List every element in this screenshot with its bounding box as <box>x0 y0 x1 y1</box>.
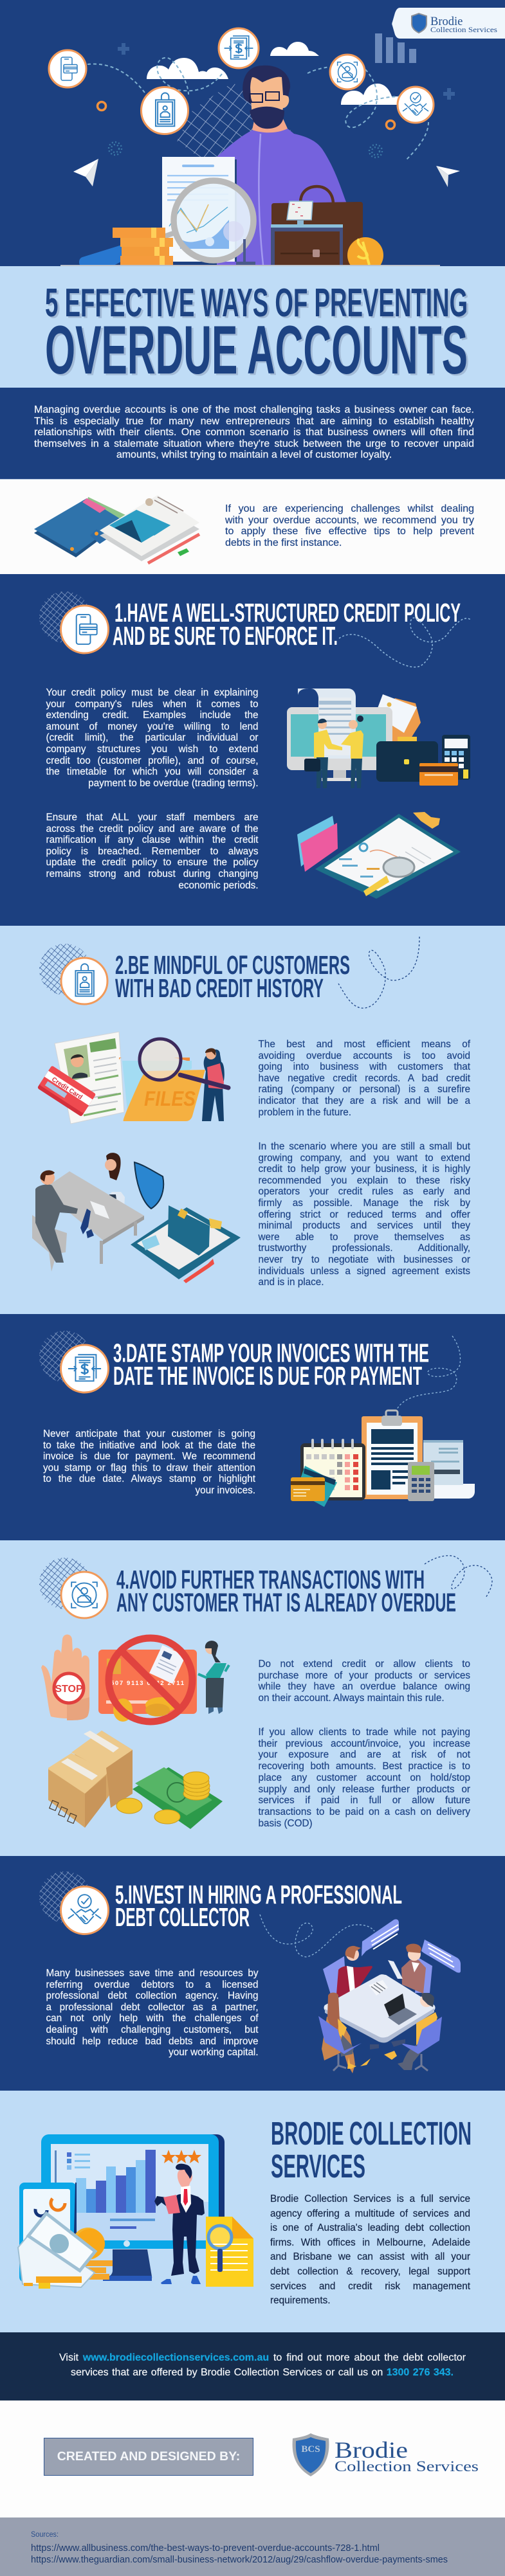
body text 1 <box>46 687 259 789</box>
intro text: Managing overdue accounts is one of the most challenging tasks a business owner can face. <box>34 404 474 415</box>
body text 8: a professional debt collector as a partner, <box>46 2002 259 2013</box>
illustration: stop hand and blocked card: STOP <box>55 1684 83 1695</box>
plus marks <box>118 43 455 100</box>
body text 4 <box>258 1141 471 1288</box>
body text 7: transactions to be paid on a cash on delivery <box>259 1806 470 1817</box>
call to action text: Visit www.brodiecollectionservices.com.au to find out more about the debt collector <box>59 2352 466 2363</box>
body text 4: were able to prove themselves as <box>259 1232 470 1243</box>
body text 2: update the credit policy to ensure the policy <box>46 857 259 868</box>
body text 8: Many businesses save time and resources by <box>46 1968 259 1979</box>
icon: blocked customer <box>330 55 365 89</box>
body text 7: basis (COD) <box>259 1818 313 1829</box>
title <box>45 281 470 388</box>
body text 5: Never anticipate that your customer is going <box>43 1428 255 1439</box>
about text: and Brisbane we can assist with all your <box>270 2251 470 2262</box>
about text: requirements. <box>270 2295 331 2306</box>
body text 5: your invoices. <box>195 1485 255 1496</box>
intro text: This is especially true for many new entrepreneurs that are aiming to establish healthy <box>34 416 474 427</box>
coin stack <box>113 228 173 265</box>
body text 3: The best and most efficient means of <box>259 1039 470 1050</box>
panel: hero illustration <box>0 0 505 266</box>
icon: handshake <box>398 87 434 123</box>
body text 8: should help reduce bad debts and improve <box>46 2036 259 2047</box>
body text 1: credit too (customer profile), and of course, <box>46 755 259 766</box>
heading <box>113 598 461 651</box>
heading <box>271 2115 472 2184</box>
illustration: credit file review <box>37 1032 228 1124</box>
illustration: analyst with dashboard <box>18 2134 253 2289</box>
body text 7 <box>259 1727 471 1829</box>
body text 5 <box>42 1428 255 1496</box>
lattice backdrop <box>177 82 302 167</box>
body text 4: individuals unless a signed agreement exists <box>259 1266 470 1277</box>
body text 8 <box>46 1968 259 2058</box>
panel: about Brodie Collection Services <box>0 2091 505 2332</box>
body text 6: purchase more of your products or services <box>259 1670 470 1681</box>
body text 1: the timetable for which you will consider a <box>46 766 259 777</box>
dollar coin <box>347 237 383 273</box>
body text 7: services if paid in full or allow future <box>259 1795 470 1806</box>
body text 7: your exposure and are at risk of not <box>259 1749 470 1760</box>
panel: credit <box>0 2400 505 2517</box>
body text 1: payment to be overdue (trading terms). <box>88 778 259 789</box>
illustration: stop hand and blocked card: 507 9113 0142 2711 <box>111 1680 185 1687</box>
logo: Collection Services <box>335 2458 479 2474</box>
call to action text <box>59 2352 466 2378</box>
body text 7: supply and only release further products or <box>259 1784 470 1795</box>
sources list: Sources: <box>31 2531 59 2539</box>
body text 3: indicator that they are a risk and will be a <box>259 1095 470 1106</box>
body text 4: recommended you explain to these risky <box>259 1175 470 1186</box>
icon: blocked customer badge <box>61 1572 107 1618</box>
heading: WITH BAD CREDIT HISTORY <box>115 973 324 1003</box>
sources list: https://www.theguardian.com/small-business-network/2012/aug/29/cashflow-overdue-payments-smes <box>31 2555 448 2565</box>
body text 4: trustworthy professionals. Additionally, <box>259 1243 470 1254</box>
wallet and documents illustration <box>34 495 201 564</box>
recommendation text: with your overdue accounts, we recommend you try <box>225 515 474 526</box>
body text 6: while they have an overdue balance owing <box>259 1681 470 1692</box>
body text 4: operators your credit rules as early and <box>259 1186 470 1197</box>
table edge <box>60 265 440 266</box>
logo: BCS <box>301 2444 320 2454</box>
heading <box>113 1338 429 1391</box>
burst marks <box>109 142 382 158</box>
about text: agency offering a multitude of services and <box>270 2208 470 2219</box>
body text 4: firmly as possible. Manage the risk by <box>259 1198 470 1209</box>
illustration: cards and clipboard <box>297 812 461 899</box>
intro text <box>34 404 475 460</box>
body text 4: credit to help grow your business, it is highly <box>259 1164 470 1175</box>
logo tab: Collection Services <box>430 26 498 34</box>
about text: firms. With offices in Melbourne, Adelaide <box>270 2237 470 2248</box>
body text 1: extending credit. Examples include the <box>46 710 259 721</box>
body text 4: In the scenario where you are still a small but <box>259 1141 470 1152</box>
body text 3: avoiding overdue accounts is too avoid <box>259 1050 470 1061</box>
illustration: boxes and money <box>48 1731 223 1829</box>
logo <box>292 2433 479 2476</box>
body text 7: place any customer account on hold/stop <box>259 1772 470 1783</box>
heading <box>115 950 350 1003</box>
dotted path <box>397 1336 461 1409</box>
body text 3: going into business with customers that <box>259 1061 470 1072</box>
lattice decoration <box>39 1871 91 1923</box>
body text 5: invoice is due for payment. We recommend <box>43 1451 255 1462</box>
body text 8: referring overdue debtors to a licensed <box>46 1979 259 1990</box>
dotted path <box>260 1914 374 1957</box>
panel: tip 3 <box>0 1314 505 1540</box>
body text 7: recovering both amounts. Best practice is to <box>259 1761 470 1772</box>
illustration: meeting with shield and briefcase <box>32 1153 241 1283</box>
body text 5: to take the initiative and look at the date the <box>43 1440 255 1451</box>
call to action text: services that are offered by Brodie Collection Services or call us on 1300 276 343. <box>71 2367 454 2378</box>
body text 3: problem in the future. <box>259 1107 351 1118</box>
magnifier and chart <box>79 181 253 266</box>
lattice decoration <box>39 1331 91 1382</box>
illustration: credit file review: FILES <box>144 1087 196 1110</box>
panel: call to action <box>0 2332 505 2400</box>
body text 4: and is in place. <box>259 1277 324 1288</box>
body text 2: economic periods. <box>178 880 259 891</box>
icon: document with lock badge <box>61 958 107 1004</box>
lattice decoration <box>39 591 91 643</box>
body text 5: you stamp or flag this to draw their attention <box>43 1463 255 1473</box>
recommendation text: debts in the first instance. <box>225 537 342 548</box>
heading <box>115 1880 402 1932</box>
dotted flight paths <box>87 58 428 159</box>
orange rings <box>98 102 395 129</box>
heading: SERVICES <box>271 2148 365 2184</box>
sources list: https://www.allbusiness.com/the-best-ways-to-prevent-overdue-accounts-728-1.html <box>31 2543 380 2553</box>
illustration: stop hand and blocked card <box>41 1634 229 1722</box>
intro text: amounts, whilst trying to maintain a level of customer loyalty. <box>116 449 392 460</box>
panel: tip 4 <box>0 1540 505 1856</box>
body text 3 <box>259 1039 471 1118</box>
body text 2: across the credit policy and are aware of the <box>46 824 259 834</box>
panel: introduction <box>0 388 505 479</box>
body text 7: their previous account/invoice, you increase <box>259 1738 470 1749</box>
body text 2: policy is breached. Remember to always <box>46 846 259 857</box>
body text 2 <box>46 812 259 891</box>
intro text: relationships with their clients. One common scenario is that business owners will often find <box>34 427 474 438</box>
lattice decoration <box>39 1558 91 1609</box>
icon: handshake badge <box>60 1886 108 1934</box>
lattice decoration <box>39 944 91 995</box>
heading: AND BE SURE TO ENFORCE IT. <box>113 621 338 651</box>
man <box>217 66 350 266</box>
body text 4: never try to negotiate with businesses or <box>259 1254 470 1265</box>
body text 3: have negative credit records. A bad credit <box>259 1073 470 1084</box>
body text 1: company structures you wish to extend <box>46 744 259 755</box>
icon: phone and card badge <box>60 606 108 653</box>
icon: dollar document <box>219 28 259 68</box>
dotted path <box>338 937 419 1008</box>
sources list <box>31 2531 448 2565</box>
panel: white recommendation band <box>0 479 505 574</box>
dotted path <box>425 1556 492 1598</box>
recommendation text <box>225 503 475 548</box>
body text 8: can not only help with the challenges of <box>46 2013 259 2024</box>
about text <box>270 2193 470 2306</box>
panel: sources <box>0 2517 505 2576</box>
about text: services and credit risk management <box>270 2281 470 2292</box>
bar chart decoration <box>375 33 416 63</box>
heading <box>116 1565 456 1617</box>
body text 4: offering strict or reduced terms and offer <box>259 1209 470 1220</box>
icon: phone and card <box>49 50 86 87</box>
body text 6: Do not extend credit or allow clients to <box>259 1659 470 1670</box>
created and designed by box: CREATED AND DESIGNED BY: <box>57 2449 240 2463</box>
panel: tip 2 <box>0 926 505 1314</box>
panel: tip 5 <box>0 1856 505 2091</box>
paper planes <box>73 159 460 187</box>
illustration: invoice set <box>291 1410 475 1507</box>
about text: is one of Australia's leading debt collection <box>270 2222 470 2233</box>
body text 8: dealing with challenging customers, but <box>46 2024 259 2035</box>
body text 7: If you allow clients to trade while not paying <box>259 1727 470 1738</box>
briefcase and tablet <box>271 186 363 265</box>
body text 1: (credit limit), the particular individual or <box>46 732 259 743</box>
body text 5: to the due date. Always stamp or highlight <box>43 1473 255 1484</box>
body text 8: professional debt collection agency. Having <box>46 1990 259 2001</box>
desk stand <box>236 239 255 265</box>
body text 2: ramification if any clause within the credit <box>46 834 259 845</box>
clouds <box>147 42 399 105</box>
body text 3: rating (company or personal) is a surefire <box>259 1084 470 1095</box>
illustration: handshake at computer <box>287 689 470 788</box>
body text 2: Ensure that ALL your staff members are <box>46 812 259 823</box>
dotted path <box>339 618 472 667</box>
body text 4: minimal products and services until they <box>259 1220 470 1231</box>
body text 2: remains strong and robust during changing <box>46 869 259 879</box>
about text: debt collection & recovery, legal support <box>270 2266 470 2277</box>
body text 4: growing company, and you want to extend <box>259 1153 470 1164</box>
body text 8: your working capital. <box>169 2047 259 2058</box>
logo tab <box>392 8 505 39</box>
created and designed by box <box>44 2438 253 2476</box>
body text 1: your company's rules when it comes to <box>46 699 259 710</box>
icon: dollar document badge <box>60 1345 108 1392</box>
illustration: credit file review: Credit Card <box>50 1076 84 1101</box>
logo: Brodie <box>335 2437 408 2463</box>
heading: DEBT COLLECTOR <box>115 1902 250 1932</box>
logo tab: Brodie <box>430 15 463 28</box>
panel: title band <box>0 266 505 388</box>
recommendation text: If you are experiencing challenges whilst dealing <box>225 503 474 514</box>
recommendation text: to apply these five effective tips to help prevent <box>225 526 474 537</box>
body text 6: on their account. Always maintain this rule. <box>259 1693 445 1704</box>
icon: document with lock <box>142 87 188 134</box>
illustration: team meeting <box>318 1919 461 2073</box>
body text 6 <box>258 1659 470 1704</box>
panel: tip 1 <box>0 574 505 926</box>
intro text: themselves in a stalemate situation where they're stuck between the urge to recover unpaid <box>34 438 474 449</box>
body text 1: Your credit policy must be clear in explaining <box>46 687 259 698</box>
body text 1: amount of money you're willing to lend <box>46 721 259 732</box>
report paper <box>162 157 237 262</box>
about text: Brodie Collection Services is a full service <box>270 2193 470 2204</box>
